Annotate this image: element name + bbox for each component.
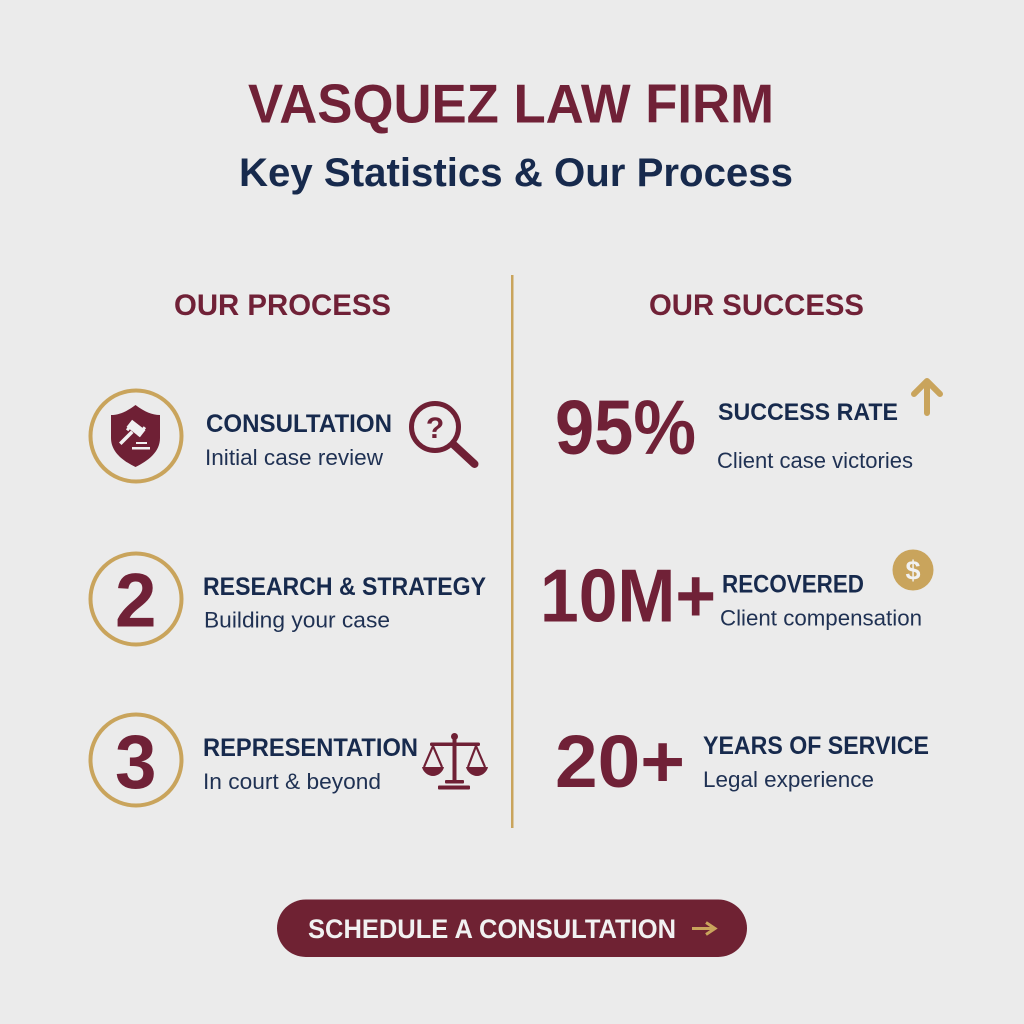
stat value: 10M+ — [540, 554, 716, 638]
icon: magnifying glass with question mark: ? — [426, 412, 444, 445]
icon: arrow — [692, 922, 715, 934]
step description: Building your case — [204, 608, 390, 632]
title: VASQUEZ LAW FIRM — [248, 72, 774, 134]
step 1: consultation — [90, 390, 474, 482]
step number 3: 3 — [115, 720, 156, 805]
stat: recovered — [540, 550, 934, 638]
step 2: research and strategy — [90, 554, 486, 644]
stat title: YEARS OF SERVICE — [703, 732, 929, 760]
icon: shield with gavel in gold ring — [90, 390, 182, 482]
subtitle: Key Statistics & Our Process — [239, 151, 793, 195]
stat: success rate — [555, 381, 940, 473]
stat: years of service — [555, 720, 929, 803]
icon: dollar coin: $ — [905, 556, 921, 586]
step title: REPRESENTATION — [203, 734, 418, 762]
step description: Initial case review — [205, 445, 384, 470]
button: schedule a consultation — [277, 900, 747, 957]
step number 2: 2 — [115, 558, 156, 644]
heading: our success: OUR SUCCESS — [649, 289, 864, 322]
panel: our success — [540, 381, 940, 803]
step number 2 — [90, 554, 182, 644]
icon: up arrow — [914, 381, 940, 413]
icon: magnifying glass with question mark — [412, 404, 474, 464]
panel: our process — [90, 390, 488, 806]
stat description: Legal experience — [703, 767, 874, 792]
stat value: 95% — [555, 385, 696, 471]
icon: scales of justice — [422, 733, 488, 790]
stat description: Client case victories — [717, 448, 913, 473]
button: schedule a consultation: SCHEDULE A CONSULTATION — [308, 914, 676, 944]
stat title: RECOVERED — [722, 570, 864, 598]
step number 3 — [90, 714, 182, 806]
stat value: 20+ — [555, 720, 685, 803]
step title: CONSULTATION — [206, 410, 392, 438]
stat description: Client compensation — [720, 606, 922, 630]
icon: dollar coin — [892, 550, 934, 590]
step title: RESEARCH & STRATEGY — [203, 573, 486, 601]
step 3: representation — [90, 714, 488, 806]
step description: In court & beyond — [203, 769, 381, 794]
stat title: SUCCESS RATE — [718, 399, 898, 426]
heading: our process: OUR PROCESS — [174, 289, 391, 322]
